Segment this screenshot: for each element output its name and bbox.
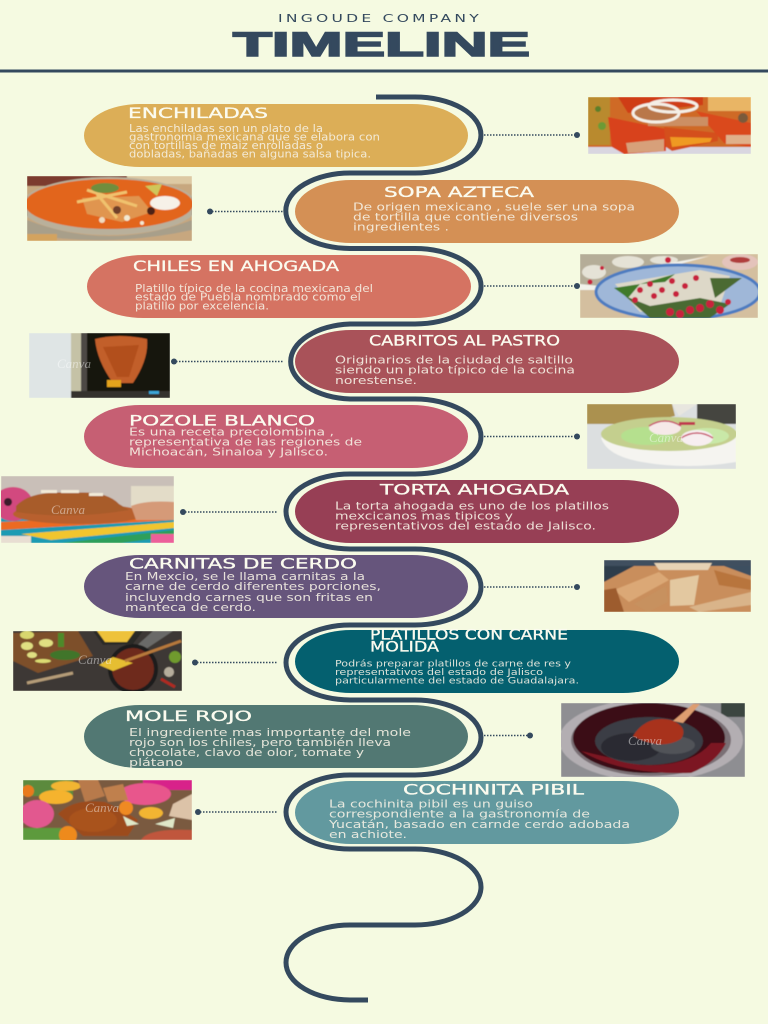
connector: chiles en ahogada <box>484 283 580 289</box>
body text: en achiote. <box>329 829 407 841</box>
panel: mole rojo <box>84 705 468 769</box>
body text: particularmente del estado de Guadalajara. <box>335 676 579 686</box>
photo: chiles en ahogada <box>580 254 758 318</box>
header rule <box>0 70 768 72</box>
watermark: Canva <box>85 800 119 815</box>
pill <box>84 405 468 468</box>
body text: dobladas, bañadas en alguna salsa tipica. <box>129 148 371 160</box>
body text: gastronomia mexicana que se elabora con <box>129 132 380 144</box>
pill <box>84 555 468 618</box>
body text: manteca de cerdo. <box>125 602 256 614</box>
body text <box>335 354 575 387</box>
body text <box>335 658 579 686</box>
title: TIMELINE <box>233 26 530 64</box>
pill <box>84 104 468 167</box>
connector: platillos con carne molida <box>192 660 278 666</box>
photo: platillos con carne molida <box>13 631 182 691</box>
pill <box>295 781 679 844</box>
pill <box>295 630 679 693</box>
body text: mexcicanos mas tipicos y <box>335 510 513 522</box>
body text: Originarios de la ciudad de saltillo <box>335 354 573 366</box>
heading: CABRITOS AL PASTRO <box>369 334 560 350</box>
body text <box>129 426 362 458</box>
body text: El ingrediente mas importante del mole <box>129 727 411 739</box>
body text: Michoacán, Sinaloa y Jalisco. <box>129 446 328 458</box>
photo: sopa azteca <box>27 176 192 241</box>
body text <box>135 283 373 312</box>
pill <box>295 480 679 543</box>
connector: pozole blanco <box>484 434 580 440</box>
connector: sopa azteca <box>207 208 283 214</box>
panel: enchiladas <box>84 104 468 167</box>
photo: pozole blanco <box>587 404 736 469</box>
body text: Platillo típico de la cocina mexicana del <box>135 283 373 295</box>
watermark: Canva <box>649 430 683 445</box>
body text: correspondiente a la gastronomía de <box>329 808 590 820</box>
watermark: Canva <box>78 652 112 667</box>
body text: estado de Puebla nombrado como el <box>135 292 361 304</box>
panel: platillos con carne molida <box>295 628 679 693</box>
heading: TORTA AHOGADA <box>378 482 570 498</box>
body text <box>353 202 635 234</box>
body text: Es una receta precolombina , <box>129 426 334 438</box>
photo: enchiladas <box>588 97 751 154</box>
connector: cabritos al pastro <box>171 358 283 364</box>
photo: mole rojo <box>561 703 745 777</box>
body text: ingredientes . <box>353 222 449 234</box>
panel: cochinita pibil <box>295 781 679 844</box>
heading: MOLE ROJO <box>125 709 252 725</box>
body text: En Mexcio, se le llama carnitas a la <box>125 571 365 583</box>
pill <box>87 255 471 318</box>
body text: representativa de las regiones de <box>129 436 362 448</box>
serpentine timeline path <box>286 97 481 1000</box>
body text: representativos del estado de Jalisco. <box>335 520 596 532</box>
body text: norestense. <box>335 375 417 387</box>
body text: representativos del estado de Jalisco <box>335 667 543 678</box>
panel: carnitas de cerdo <box>84 555 468 618</box>
photo: cochinita pibil <box>23 780 192 840</box>
body text: Yucatán, basado en carnde cerdo adobada <box>328 819 630 831</box>
body text <box>125 571 381 614</box>
heading: CHILES EN AHOGADA <box>133 259 340 275</box>
body text: chocolate, clavo de olor, tomate y <box>129 747 364 759</box>
panel: torta ahogada <box>295 480 679 543</box>
connector: enchiladas <box>484 132 580 138</box>
heading: ENCHILADAS <box>128 106 268 122</box>
company name: INGOUDE COMPANY <box>278 13 482 25</box>
heading: CARNITAS DE CERDO <box>129 556 357 572</box>
heading: MOLIDA <box>370 640 440 656</box>
heading: SOPA AZTECA <box>384 185 535 201</box>
panel: cabritos al pastro <box>295 330 679 393</box>
pill <box>295 180 679 243</box>
body text: siendo un plato típico de la cocina <box>335 364 575 376</box>
body text: Las enchiladas son un plato de la <box>129 123 323 135</box>
heading <box>370 628 568 656</box>
heading: COCHINITA PIBIL <box>403 782 584 798</box>
body text <box>129 727 411 769</box>
body text: con tortillas de maiz enrolladas o <box>129 140 323 152</box>
body text: La torta ahogada es uno de los platillos <box>335 500 609 512</box>
body text <box>129 123 380 160</box>
pill <box>84 705 468 768</box>
body text: carne de cerdo diferentes porciones, <box>125 581 381 593</box>
body text: Podrás preparar platillos de carne de res y <box>335 658 572 670</box>
body text <box>328 798 630 841</box>
connector: cochinita pibil <box>195 809 278 815</box>
body text: rojo son los chiles, pero también lleva <box>129 737 391 749</box>
panel: chiles en ahogada <box>87 255 471 318</box>
body text <box>335 500 609 532</box>
watermark: Canva <box>51 502 85 517</box>
connector: carnitas de cerdo <box>484 584 580 590</box>
connector: mole rojo <box>484 732 533 738</box>
photo: torta ahogada <box>1 476 174 543</box>
body text: plátano <box>129 757 183 769</box>
connector: torta ahogada <box>180 509 278 515</box>
heading: POZOLE BLANCO <box>129 414 315 430</box>
pill <box>295 330 679 393</box>
heading: PLATILLOS CON CARNE <box>370 628 568 644</box>
body text: de tortilla que contiene diversos <box>353 212 578 224</box>
watermark: Canva <box>628 733 662 748</box>
body text: platillo por excelencia. <box>135 300 269 312</box>
photo: carnitas <box>604 560 751 612</box>
photo: cabritos al pastro <box>29 333 170 398</box>
panel: sopa azteca <box>295 180 679 243</box>
body text: La cochinita pibil es un guiso <box>329 798 533 810</box>
body text: De origen mexicano , suele ser una sopa <box>353 202 635 214</box>
watermark: Canva <box>57 356 91 371</box>
body text: incluyendo carnes que son fritas en <box>125 592 373 604</box>
panel: pozole blanco <box>84 405 468 468</box>
